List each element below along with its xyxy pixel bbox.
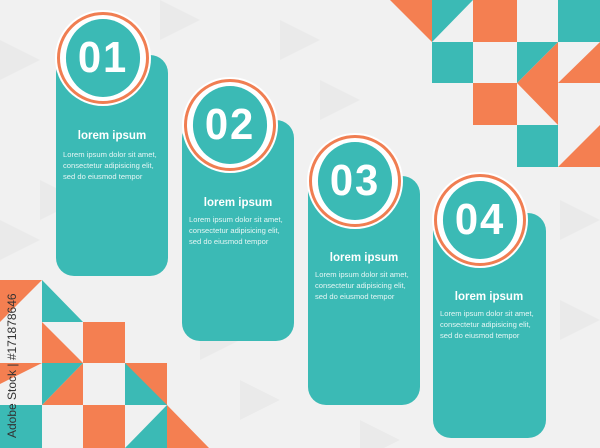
text 02: Lorem ipsum dolor sit amet, consectetur adipisicing elit, sed do eiusmod tempor [189,215,283,246]
badge 03 [307,133,403,229]
heading 03: lorem ipsum [330,252,398,264]
panel: step 02 [182,77,294,341]
badge 03: 03 [330,156,380,205]
badge 04 [432,172,528,268]
badge 01 [55,10,151,106]
heading 02: lorem ipsum [204,197,272,209]
panel: step 01 [55,10,168,276]
text 04: Lorem ipsum dolor sit amet, consectetur adipisicing elit, sed do eiusmod tempor [440,309,534,340]
panel: step 04 [432,172,546,438]
heading 04: lorem ipsum [455,291,523,303]
watermark id text: Adobe Stock | #171878646 [5,293,19,438]
heading 01: lorem ipsum [78,130,146,142]
badge 04: 04 [455,195,505,244]
panel: step 03 [307,133,420,405]
badge 02: 02 [205,100,255,149]
text 01: Lorem ipsum dolor sit amet, consectetur adipisicing elit, sed do eiusmod tempor [63,150,157,181]
badge 02 [182,77,278,173]
text 03: Lorem ipsum dolor sit amet, consectetur adipisicing elit, sed do eiusmod tempor [315,270,409,301]
badge 01: 01 [78,33,128,82]
